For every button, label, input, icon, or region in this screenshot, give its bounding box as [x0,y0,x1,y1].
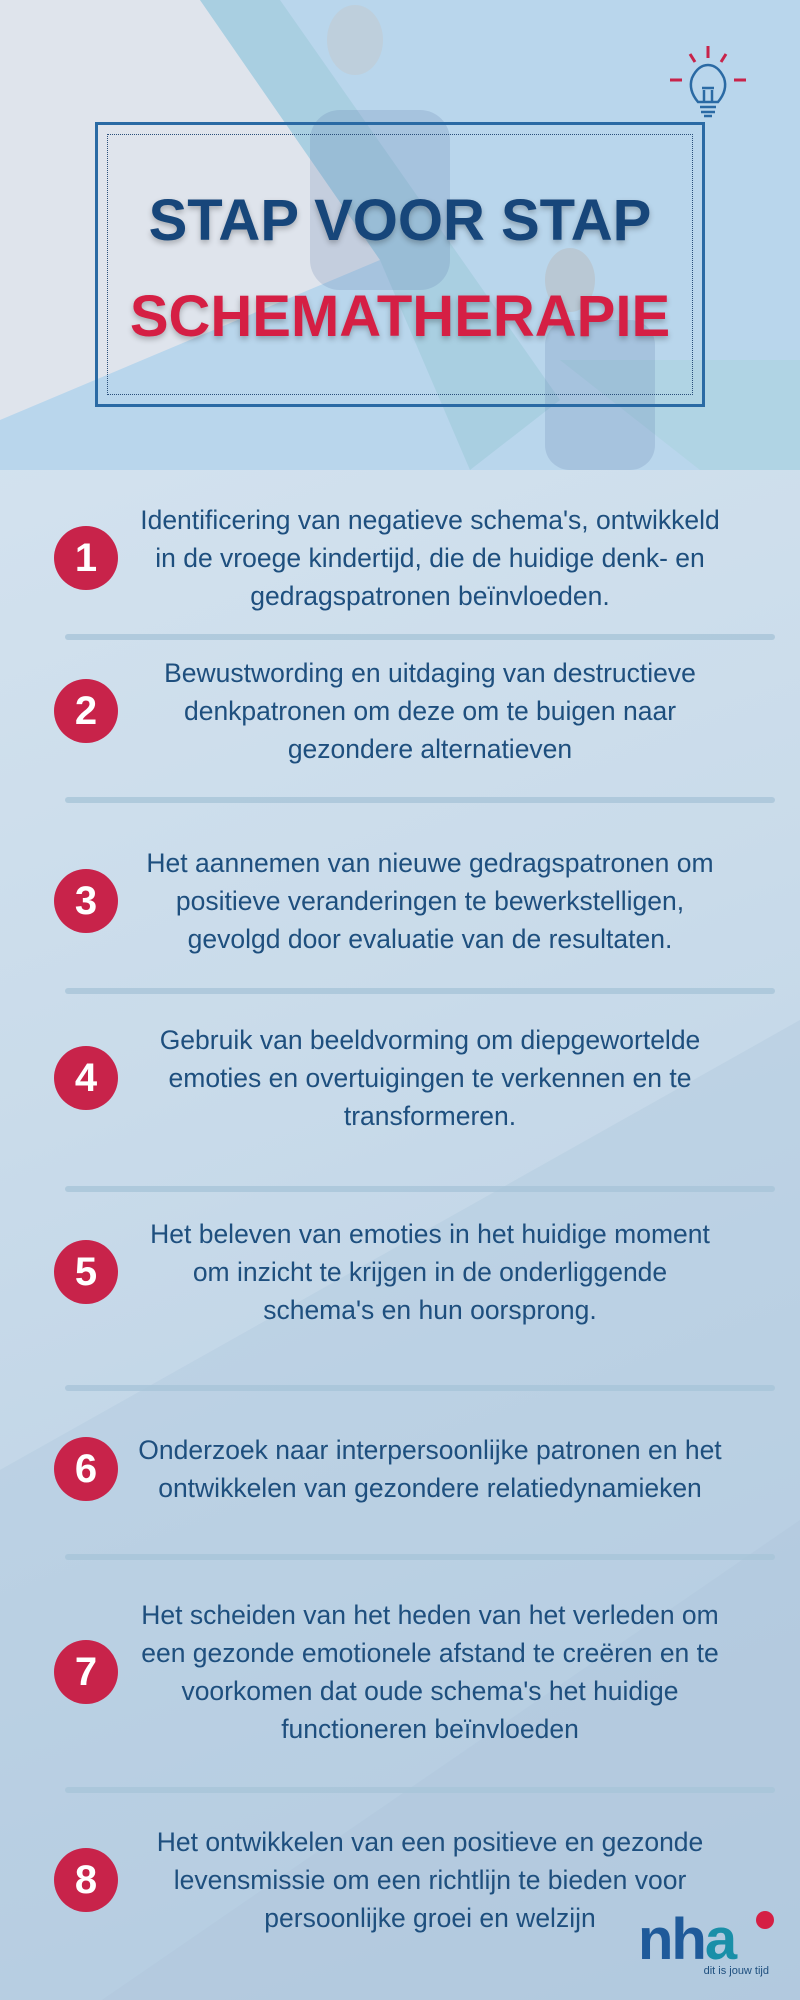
background diagonal [4,1020,800,1766]
logo: nha: dit is jouw tijd [704,1965,769,1977]
person silhouettes [327,5,383,75]
subtitle: SCHEMATHERAPIE [130,284,670,349]
logo: nha [638,1907,774,1977]
header [0,0,800,470]
step 5 [54,1219,710,1325]
step 3: Het aannemen van nieuwe gedragspatronen om positieve veranderingen te bewerkstelligen, gevolgd door evaluatie van de resultaten. [146,848,714,954]
step 8: 8 [75,1858,97,1902]
step 2: Bewustwording en uitdaging van destructieve denkpatronen om deze om te buigen naar gezondere alternatieven [164,658,696,764]
step 7: 7 [75,1650,97,1694]
step 4: Gebruik van beeldvorming om diepgewortelde emoties en overtuigingen te verkennen en te transformeren. [160,1025,700,1131]
step 5: schema's en hun oorsprong. [263,1295,597,1325]
icon: light bulb [670,46,746,118]
step 3: 3 [75,879,97,923]
step 1: Identificering van negatieve schema's, ontwikkeld in de vroege kindertijd, die de huidige denk- en gedragspatronen beïnvloeden. [140,505,720,611]
step 6: Onderzoek naar interpersoonlijke patronen en het ontwikkelen van gezondere relatiedynamieken [138,1435,722,1503]
step 5: Het beleven van emoties in het huidige moment om inzicht te krijgen in de onderliggende [150,1219,710,1287]
step 6: 6 [75,1447,97,1491]
step 4: 4 [75,1056,97,1100]
step 2: 2 [75,689,97,733]
step 8: Het ontwikkelen van een positieve en gezonde levensmissie om een richtlijn te bieden voor persoonlijke groei en welzijn [157,1827,703,1933]
step 7: Het scheiden van het heden van het verleden om een gezonde emotionele afstand te creëren en te voorkomen dat oude schema's het huidige functioneren beïnvloeden [141,1600,719,1744]
step 1: 1 [75,536,97,580]
logo: nha: nha [638,1907,735,1972]
title box [95,122,705,407]
step 5: 5 [75,1250,97,1294]
title: STAP VOOR STAP [149,188,651,253]
